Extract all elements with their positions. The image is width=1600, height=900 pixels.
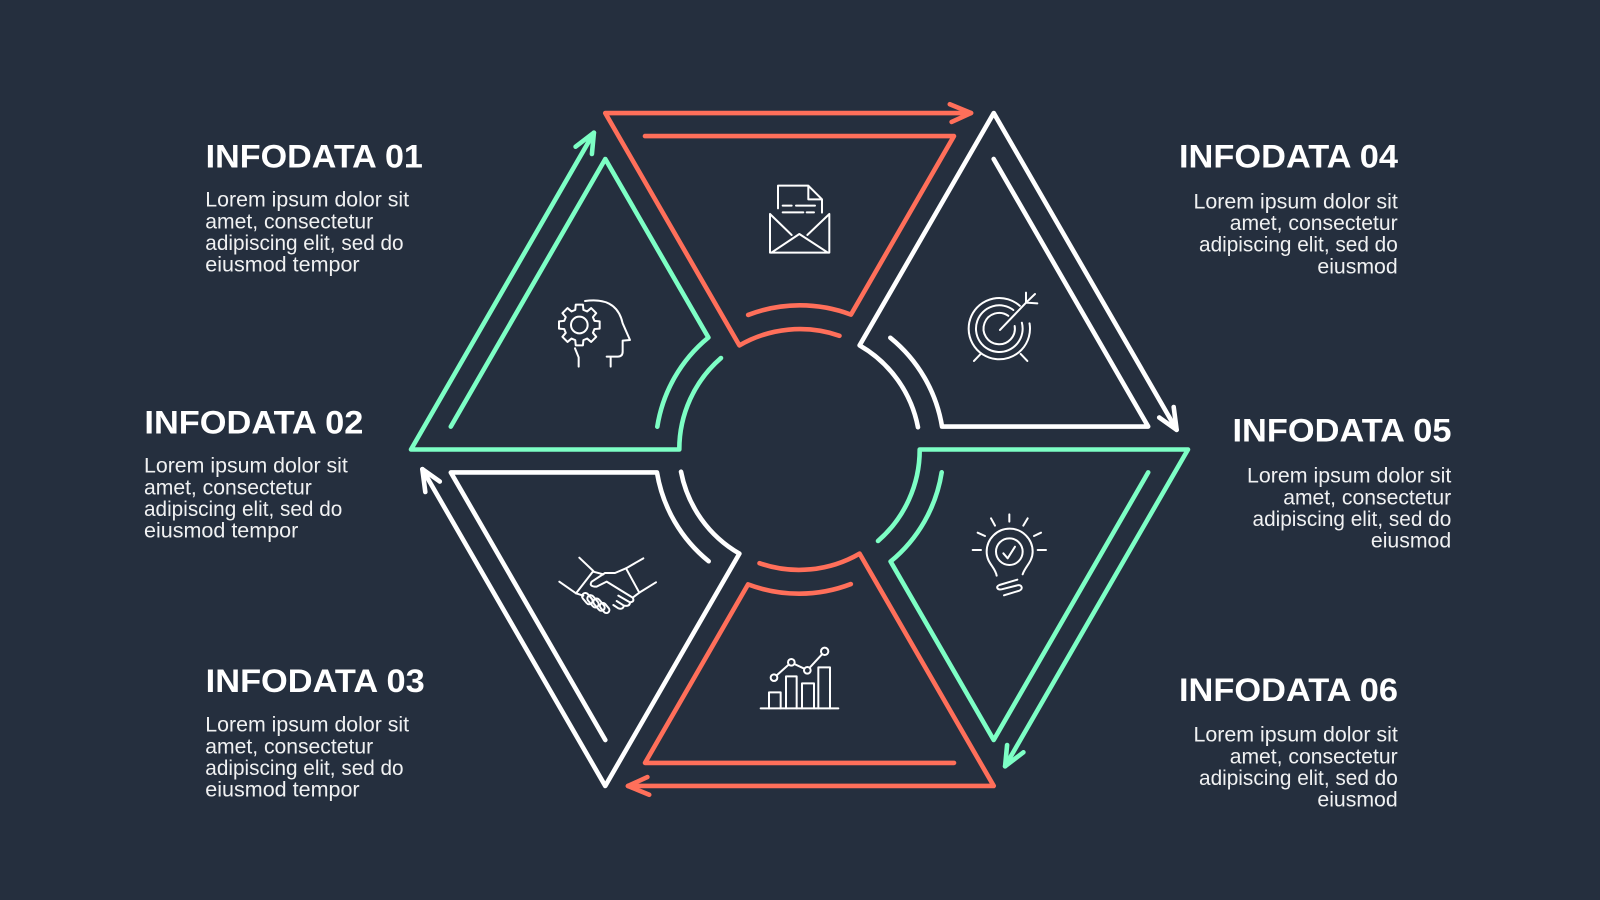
icon: light bulb with check — [973, 514, 1046, 595]
text block: INFODATA 06 — [1179, 672, 1398, 812]
text block: INFODATA 03: amet, consectetur — [205, 734, 373, 758]
icon: envelope with letter — [770, 186, 829, 253]
text block: INFODATA 02: adipiscing elit, sed do — [144, 497, 342, 521]
text block: INFODATA 05: INFODATA 05 — [1232, 413, 1452, 449]
icon: target with arrow — [969, 293, 1037, 361]
text block: INFODATA 06: Lorem ipsum dolor sit — [1194, 723, 1398, 747]
text block: INFODATA 01: adipiscing elit, sed do — [205, 231, 404, 255]
text block: INFODATA 04: eiusmod — [1317, 254, 1398, 278]
text block: INFODATA 03 — [205, 663, 425, 802]
text block: INFODATA 02: INFODATA 02 — [144, 404, 363, 440]
text block: INFODATA 05: amet, consectetur — [1283, 485, 1451, 509]
text block: INFODATA 06: amet, consectetur — [1230, 744, 1398, 768]
text block: INFODATA 01: eiusmod tempor — [205, 253, 360, 277]
text block: INFODATA 01 — [205, 138, 423, 277]
text block: INFODATA 02: amet, consectetur — [144, 475, 312, 499]
text block: INFODATA 06: adipiscing elit, sed do — [1199, 766, 1398, 790]
text block: INFODATA 04: amet, consectetur — [1230, 211, 1398, 235]
icon: gear in head — [559, 300, 630, 367]
text block: INFODATA 01: INFODATA 01 — [206, 138, 423, 174]
segment 03: white, upper right — [839, 113, 1268, 540]
text block: INFODATA 01: amet, consectetur — [205, 209, 373, 233]
segment 01: green, upper left — [411, 133, 721, 449]
text block: INFODATA 02: eiusmod tempor — [144, 519, 298, 543]
text block: INFODATA 05: Lorem ipsum dolor sit — [1247, 464, 1451, 488]
text block: INFODATA 06: eiusmod — [1317, 788, 1398, 812]
text block: INFODATA 04: Lorem ipsum dolor sit — [1194, 189, 1398, 213]
segment 06: white, lower left — [331, 359, 760, 786]
segment 04: green, lower right — [878, 450, 1188, 766]
segment 05: red, bottom — [564, 517, 994, 900]
text block: INFODATA 02 — [144, 404, 363, 543]
text block: INFODATA 06: INFODATA 06 — [1179, 672, 1398, 708]
text block: INFODATA 04: adipiscing elit, sed do — [1199, 233, 1398, 257]
text block: INFODATA 01: Lorem ipsum dolor sit — [205, 188, 409, 212]
text block: INFODATA 03: Lorem ipsum dolor sit — [205, 713, 409, 737]
text block: INFODATA 03: INFODATA 03 — [206, 663, 425, 699]
text block: INFODATA 03: eiusmod tempor — [205, 778, 360, 802]
icon: handshake — [559, 558, 656, 614]
text block: INFODATA 05: eiusmod — [1371, 529, 1451, 553]
segment 02: red, top — [605, 0, 1035, 382]
text block: INFODATA 04 — [1179, 139, 1398, 278]
text block: INFODATA 04: INFODATA 04 — [1179, 139, 1398, 175]
text block: INFODATA 03: adipiscing elit, sed do — [205, 756, 404, 780]
icon: bar chart with trend line — [761, 648, 838, 708]
text block: INFODATA 05: adipiscing elit, sed do — [1252, 507, 1451, 531]
text block: INFODATA 05 — [1232, 413, 1452, 553]
text block: INFODATA 02: Lorem ipsum dolor sit — [144, 454, 348, 478]
